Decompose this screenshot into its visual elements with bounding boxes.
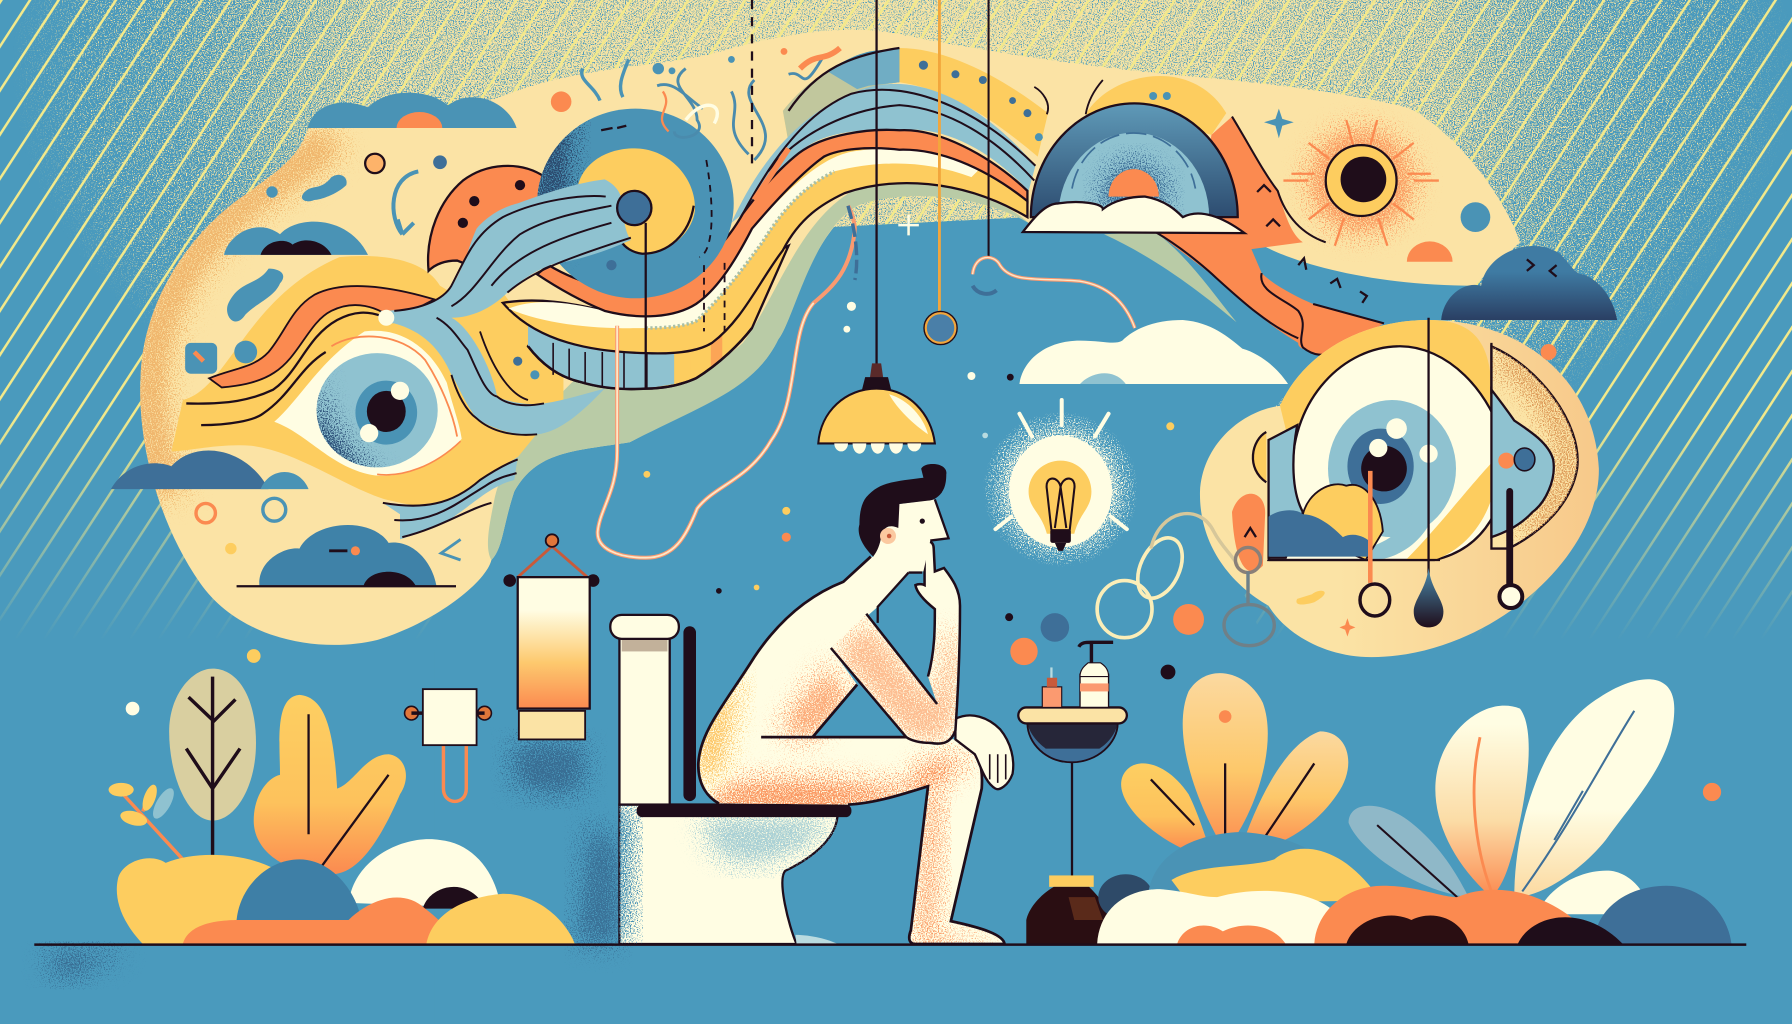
hanging ring right [1499, 491, 1522, 608]
yellow core [577, 148, 695, 254]
large yellow leaf [254, 695, 406, 874]
dome arch top right [919, 61, 1384, 355]
dark cloud [1441, 246, 1617, 320]
light bulb [983, 400, 1138, 567]
basin [1027, 723, 1118, 762]
white band [509, 149, 983, 328]
tank [619, 635, 670, 805]
pupil [367, 391, 406, 432]
big rainbow arcs [503, 48, 1048, 390]
hills [1097, 832, 1381, 944]
seat [637, 805, 851, 817]
orange patch and ring [1232, 494, 1265, 571]
front mounds [1314, 871, 1731, 944]
toilet paper holder [405, 689, 491, 801]
doodles on left cream area [185, 0, 840, 560]
hanging dark cord with lamp [818, 0, 935, 454]
hanging ring centre [1360, 471, 1390, 616]
yellow surround [1280, 320, 1491, 457]
right thought bubble [1200, 246, 1617, 657]
cloud: lower left navy [111, 450, 309, 489]
plants bottom left [109, 669, 575, 944]
blue-grey leaf [1349, 806, 1469, 897]
cloud: bottom with ground line [237, 525, 456, 586]
small bottle [1042, 667, 1062, 707]
hair [859, 464, 946, 557]
stem and vase [1026, 760, 1111, 944]
yellow wave shape [171, 256, 563, 508]
bowl shadow [577, 823, 619, 944]
blue spiral disc [537, 109, 734, 298]
head [873, 499, 949, 607]
thought cloud: main cream shape [140, 30, 1520, 645]
orange band [537, 130, 1027, 316]
cloud under dome [1023, 197, 1245, 233]
orange river band [1155, 117, 1384, 355]
iris [317, 353, 438, 467]
toilet bowl [619, 805, 838, 944]
large eyeball [1269, 346, 1506, 560]
orange half disc with dots [428, 166, 560, 274]
blue lower waves [383, 457, 518, 539]
iris [1328, 400, 1456, 537]
small sprig [109, 783, 183, 859]
stripe-bottom bowl [528, 246, 789, 389]
sink shelf and bottles [1018, 642, 1127, 944]
bushes [117, 839, 575, 944]
sparkle [898, 215, 919, 235]
towel on rail [503, 534, 599, 795]
orange centre leaf [1435, 706, 1529, 897]
top segmented band [783, 48, 1048, 157]
orange wave band [209, 286, 434, 387]
orange cord with ring [924, 0, 957, 345]
pipe [683, 626, 696, 801]
arm and hand [831, 542, 960, 744]
long wire from spiral to toilet area [598, 206, 857, 558]
dome body [1031, 103, 1238, 217]
yellow arch behind [1086, 76, 1226, 135]
petal plant [1121, 673, 1348, 851]
clouds in thought bubble [111, 93, 517, 586]
cloud: top left with orange sun [307, 93, 517, 128]
lamp and strings [598, 0, 1135, 558]
toilet [577, 615, 851, 944]
string with drop [1414, 318, 1443, 627]
spiral circle top centre [428, 109, 734, 337]
sun and sparkle [1264, 109, 1490, 262]
scattered dots [126, 302, 1721, 801]
dark behind [1098, 874, 1153, 920]
tree oval [169, 669, 256, 855]
infinity loop and ring [1097, 514, 1274, 646]
floor line [34, 943, 1746, 946]
seated man [697, 464, 1013, 951]
plants bottom right [1097, 673, 1731, 944]
left wave bands around eye [171, 256, 563, 539]
far hand on knee [955, 715, 1013, 789]
right panel [1491, 390, 1554, 537]
eye back shape [1491, 346, 1578, 549]
left flap [1269, 425, 1303, 558]
body [698, 557, 1005, 944]
tank lid [610, 615, 679, 639]
inner clouds [1303, 484, 1383, 560]
dark cord with hook [973, 0, 1135, 328]
left eye [274, 331, 462, 480]
white cloud centre right [1019, 320, 1288, 384]
pump bottle [1079, 642, 1113, 707]
large cream leaf [1514, 679, 1674, 897]
light-blue river flowing from spiral [378, 179, 651, 435]
background [0, 0, 1792, 628]
cloud: with dark centre [224, 222, 368, 255]
yellow band [503, 148, 1027, 353]
blue band [731, 84, 1035, 223]
floor shadow [46, 951, 126, 981]
